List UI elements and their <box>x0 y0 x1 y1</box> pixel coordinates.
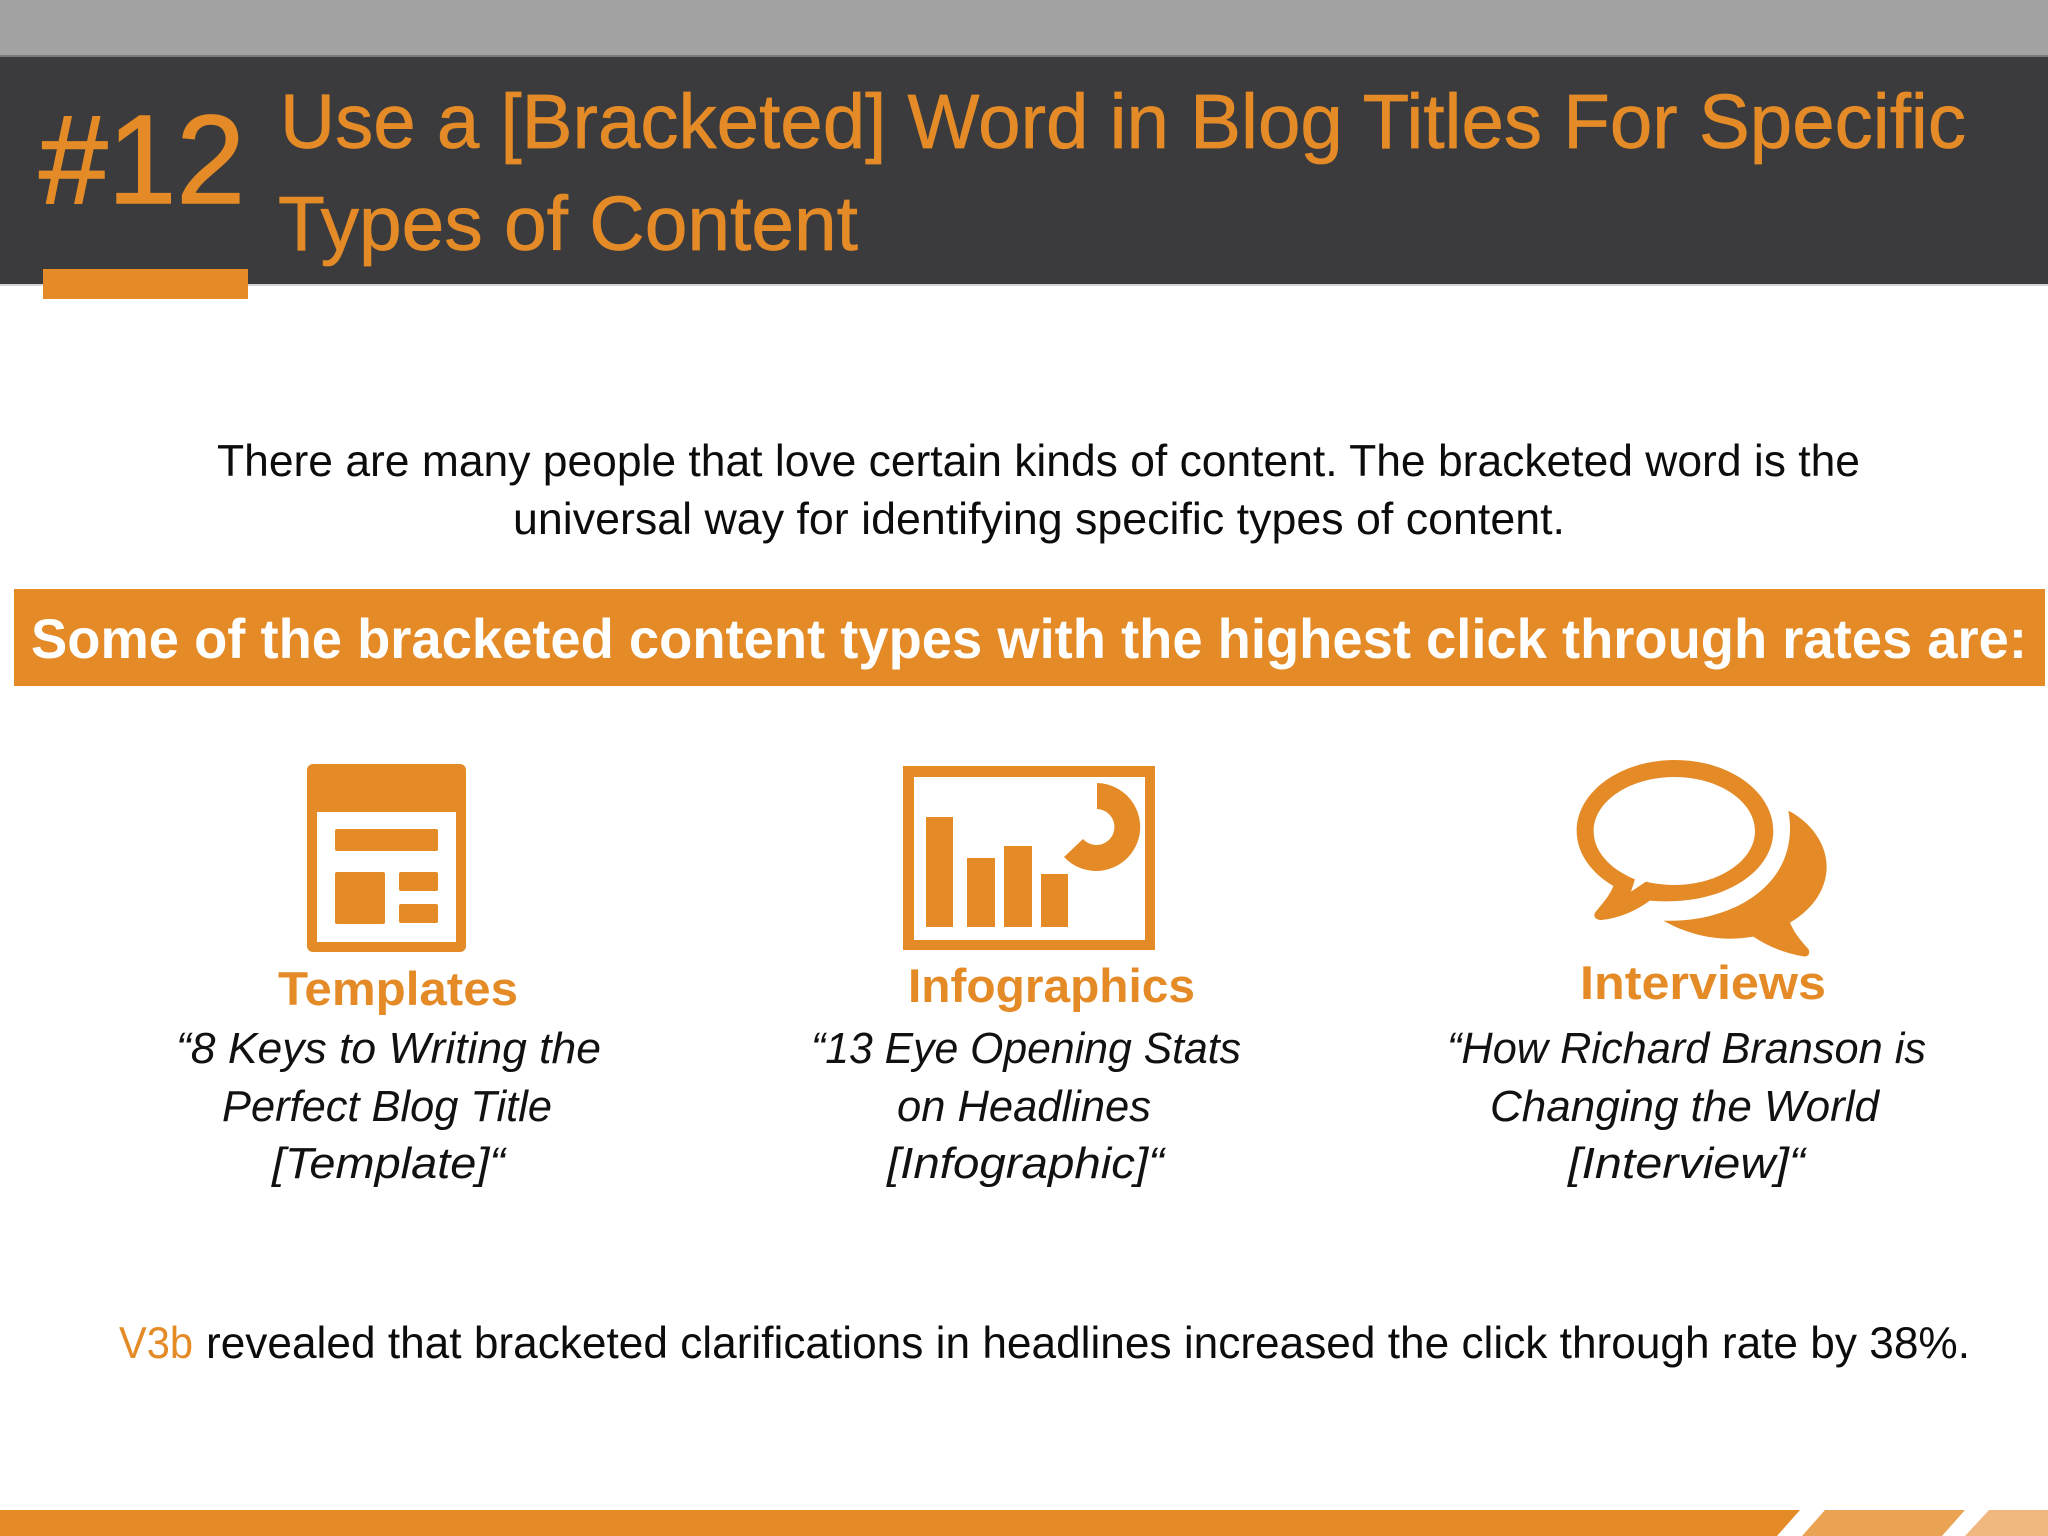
example title: interviews: [Interview]“ <box>1567 1140 1808 1188</box>
icon: speech bubbles <box>1577 760 1827 956</box>
tip number: #12 <box>39 89 245 230</box>
title: Types of Content <box>278 181 858 267</box>
icon: template page <box>307 764 466 952</box>
column: interviews <box>1447 760 1926 1188</box>
intro text: There are many people that love certain kinds of content. The bracketed word is the <box>217 437 1860 486</box>
heading: infographics: Infographics <box>908 959 1195 1012</box>
column: infographics <box>811 766 1241 1188</box>
icon: chart board <box>903 766 1155 950</box>
example title: templates: [Template]“ <box>271 1140 508 1188</box>
orange banner <box>14 589 2045 686</box>
example title: infographics: “13 Eye Opening Stats <box>811 1025 1241 1073</box>
example title: infographics: [Infographic]“ <box>886 1140 1167 1188</box>
title: Use a [Bracketed] Word in Blog Titles For Specific <box>280 79 1966 165</box>
footer stripe <box>0 1510 2048 1536</box>
intro text <box>217 437 1860 544</box>
title <box>278 79 1966 267</box>
intro text: universal way for identifying specific types of content. <box>513 495 1565 544</box>
header band <box>0 55 2048 299</box>
example title: interviews: Changing the World <box>1490 1083 1881 1131</box>
example title: templates <box>176 1025 601 1188</box>
example title: interviews <box>1447 1025 1926 1188</box>
source statement: revealed that bracketed clarifications in headlines increased the click through rate by 38%. <box>206 1319 1970 1368</box>
example title: templates: Perfect Blog Title <box>222 1083 552 1131</box>
heading: templates: Templates <box>278 962 518 1015</box>
example title: templates: “8 Keys to Writing the <box>176 1025 601 1073</box>
heading: interviews: Interviews <box>1580 956 1826 1009</box>
example title: infographics <box>811 1025 1241 1188</box>
source statement: V3b <box>119 1319 193 1368</box>
top grey strip <box>0 0 2048 56</box>
example title: interviews: “How Richard Branson is <box>1447 1025 1926 1073</box>
example title: infographics: on Headlines <box>897 1083 1151 1131</box>
column: templates <box>176 764 601 1188</box>
number underline accent <box>43 269 248 299</box>
orange banner: Some of the bracketed content types with the highest click through rates are: <box>31 607 2027 670</box>
